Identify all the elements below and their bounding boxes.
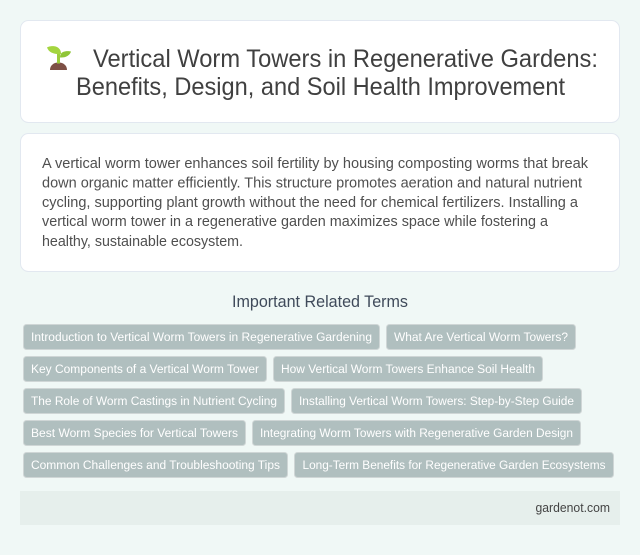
panel: related term tags	[24, 324, 614, 478]
panel: title card	[20, 20, 620, 122]
tag: How Vertical Worm Towers Enhance Soil Health	[281, 362, 535, 376]
description text: healthy, sustainable ecosystem.	[42, 234, 243, 250]
tag: What Are Vertical Worm Towers?	[394, 330, 568, 344]
title	[76, 46, 598, 101]
tag	[24, 324, 380, 350]
tag: Long-Term Benefits for Regenerative Garden Ecosystems	[302, 458, 606, 472]
description text	[42, 156, 589, 250]
tag: Common Challenges and Troubleshooting Tips	[31, 458, 280, 472]
title: Benefits, Design, and Soil Health Improvement	[76, 74, 565, 101]
tag: Key Components of a Vertical Worm Tower	[31, 362, 259, 376]
tag: Integrating Worm Towers with Regenerative Garden Design	[260, 426, 573, 440]
tag	[252, 420, 580, 446]
tag	[24, 388, 284, 414]
tag	[294, 452, 614, 478]
tag	[24, 420, 246, 446]
description text: cycling, supporting plant growth without the need for chemical fertilizers. Installing a	[42, 195, 579, 211]
footer site name: gardenot.com	[536, 500, 610, 515]
description text: A vertical worm tower enhances soil fertility by housing composting worms that break	[42, 156, 589, 172]
tag	[274, 356, 542, 382]
tag: The Role of Worm Castings in Nutrient Cycling	[31, 394, 277, 408]
tag	[24, 356, 266, 382]
tag: Best Worm Species for Vertical Towers	[31, 426, 238, 440]
tag: Installing Vertical Worm Towers: Step-by-Step Guide	[299, 394, 574, 408]
tag	[292, 388, 582, 414]
description text: vertical worm tower in a regenerative garden maximizes space while fostering a	[42, 214, 549, 230]
tag	[386, 324, 576, 350]
panel: description card	[20, 134, 620, 272]
title: Vertical Worm Towers in Regenerative Gardens:	[93, 46, 598, 73]
icon: seedling	[47, 46, 71, 70]
heading: important related terms: Important Related Terms	[232, 293, 408, 311]
description text: down organic matter efficiently. This structure promotes aeration and natural nutrient	[42, 176, 582, 192]
footer bar	[20, 491, 620, 525]
tag	[24, 452, 288, 478]
tag: Introduction to Vertical Worm Towers in Regenerative Gardening	[31, 330, 372, 344]
